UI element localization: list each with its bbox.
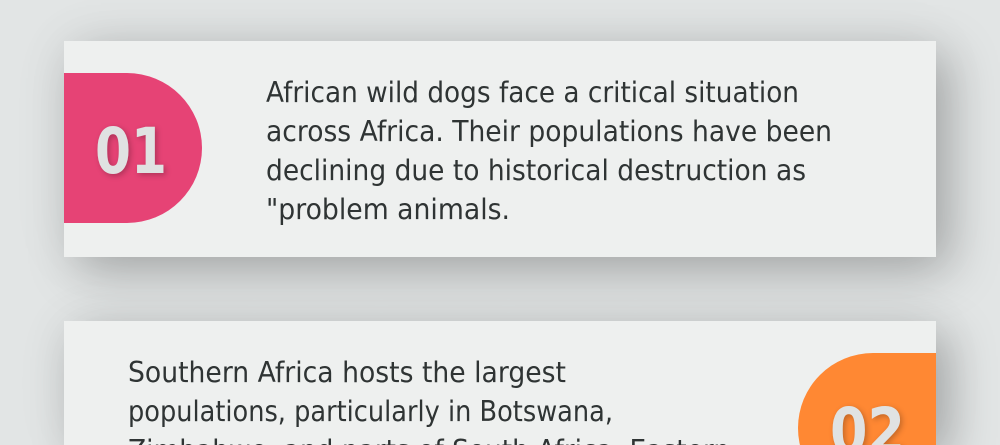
panel: card 02	[64, 321, 936, 445]
text block: southern africa: populations, particularly in Botswana,	[128, 395, 613, 428]
text block: critical situation: "problem animals.	[266, 193, 510, 226]
text block: critical situation: African wild dogs face a critical situation	[266, 76, 799, 109]
panel: card 01	[64, 41, 936, 257]
badge: 02	[798, 353, 936, 445]
text block: critical situation: across Africa. Their populations have been	[266, 115, 832, 148]
badge: 01	[64, 73, 202, 223]
text block: critical situation	[266, 76, 832, 226]
badge: 01: 01	[95, 115, 167, 188]
text block: southern africa: Southern Africa hosts the largest	[128, 356, 566, 389]
text block: critical situation: declining due to historical destruction as	[266, 154, 806, 187]
text block: southern africa	[128, 356, 730, 445]
